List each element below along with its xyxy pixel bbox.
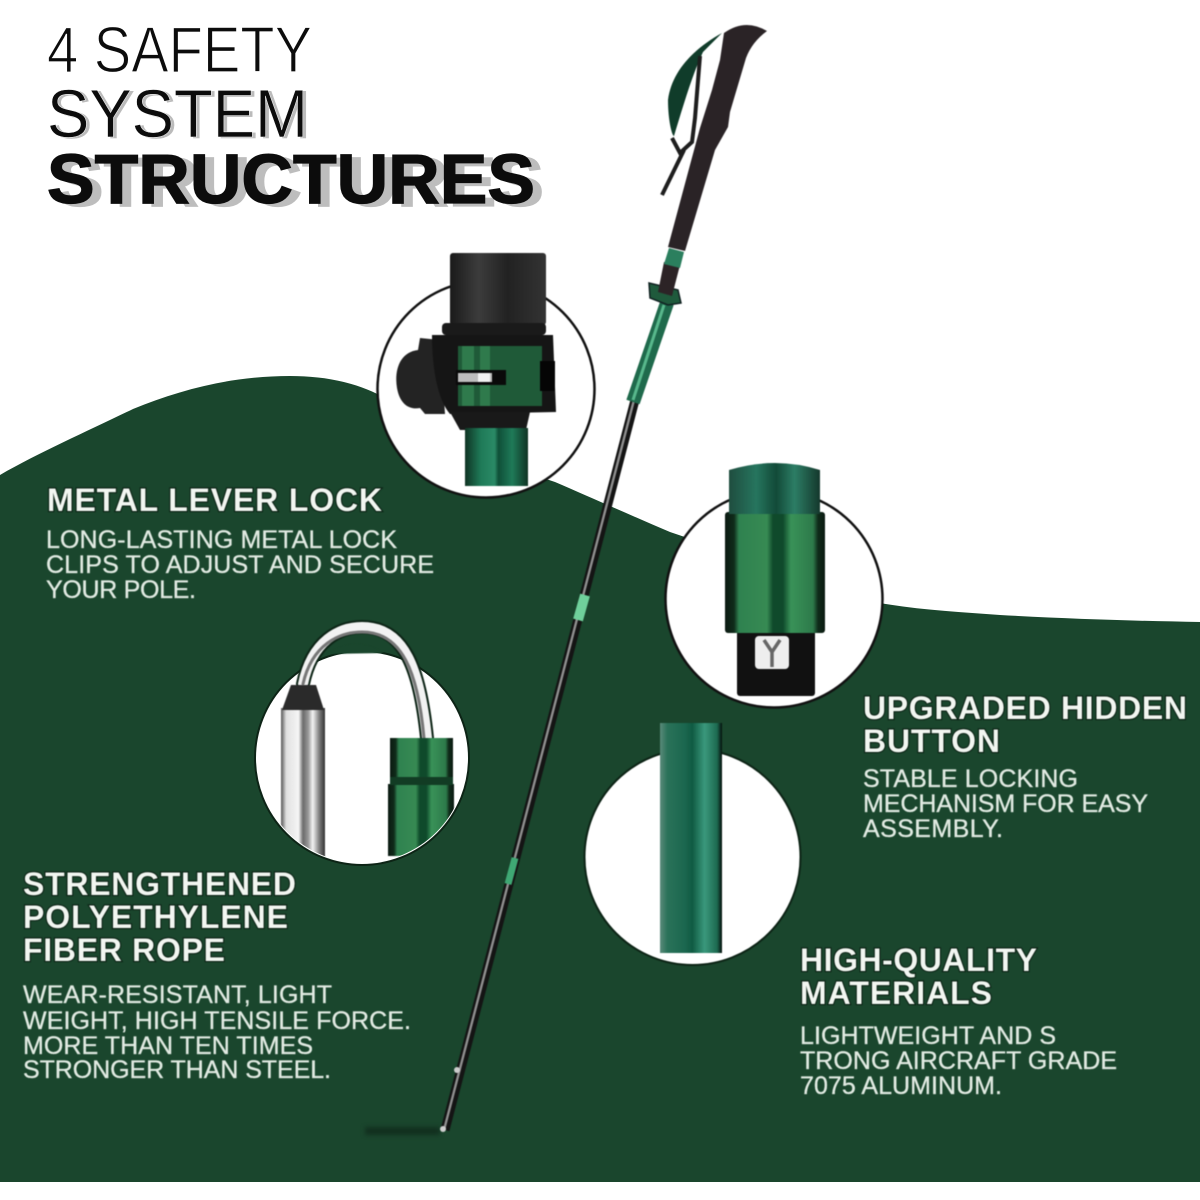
black top socket — [450, 253, 546, 325]
heading: MATERIALS — [800, 975, 992, 1011]
green hill background — [0, 376, 1200, 1182]
text: high-quality materials — [800, 942, 1117, 1100]
description — [46, 526, 434, 604]
description: LONG-LASTING METAL LOCK — [46, 526, 397, 554]
heading — [800, 942, 1037, 1011]
trekking pole — [365, 25, 767, 1135]
spring button — [755, 636, 789, 669]
detail circle: metal lever lock — [378, 253, 594, 498]
title — [47, 13, 535, 218]
heading: STRENGTHENED — [23, 866, 296, 902]
foam grip — [668, 25, 767, 251]
description: MECHANISM FOR EASY — [863, 790, 1148, 818]
title line: SYSTEM: SYSTEM — [47, 76, 308, 152]
green tube — [390, 738, 453, 778]
title line: STRUCTURES: STRUCTURES — [47, 140, 535, 218]
title line: 4 SAFETY: 4 SAFETY — [47, 13, 312, 86]
pole ground shadow — [365, 1127, 440, 1135]
text: metal lever lock — [46, 482, 434, 604]
wrist strap — [668, 33, 722, 136]
heading: BUTTON — [863, 723, 1000, 759]
heading — [863, 690, 1187, 759]
black cap — [282, 685, 324, 710]
detail circle: hidden button — [666, 463, 882, 708]
teal tube — [660, 723, 722, 953]
text: upgraded hidden button — [863, 690, 1187, 843]
description: WEIGHT, HIGH TENSILE FORCE. — [23, 1007, 411, 1035]
description: ASSEMBLY. — [863, 815, 1003, 843]
description — [23, 981, 411, 1084]
rear knob — [396, 338, 445, 414]
upper green shaft — [633, 303, 667, 402]
teal top cylinder — [729, 463, 820, 514]
rope arc — [303, 627, 427, 738]
heading: FIBER ROPE — [23, 932, 225, 968]
description: STRONGER THAN STEEL. — [23, 1056, 331, 1084]
detail circle: fiber rope — [255, 627, 469, 865]
black lower section — [737, 630, 815, 696]
heading: METAL LEVER LOCK — [47, 482, 382, 518]
upper collar — [658, 262, 680, 296]
description: WEAR-RESISTANT, LIGHT — [23, 981, 332, 1009]
description: LIGHTWEIGHT AND S — [800, 1022, 1056, 1050]
green shaft — [465, 428, 528, 486]
green lever plate — [458, 346, 542, 406]
lever lock on pole — [649, 283, 681, 305]
green sleeve — [725, 512, 825, 633]
description — [800, 1022, 1117, 1100]
description: 7075 ALUMINUM. — [800, 1072, 1002, 1100]
carbon shaft — [445, 400, 635, 1130]
heading — [23, 866, 296, 968]
silver tip — [281, 708, 325, 858]
description: YOUR POLE. — [46, 576, 196, 604]
green bands — [578, 595, 585, 620]
description: STABLE LOCKING — [863, 765, 1078, 793]
slot with bolt — [456, 370, 506, 385]
lower collar — [450, 412, 530, 430]
clamp body — [432, 335, 556, 414]
heading: UPGRADED HIDDEN — [863, 690, 1187, 726]
heading: POLYETHYLENE — [23, 899, 288, 935]
description — [863, 765, 1148, 843]
description: CLIPS TO ADJUST AND SECURE — [46, 551, 434, 579]
heading: HIGH-QUALITY — [800, 942, 1037, 978]
text: strengthened rope — [23, 866, 411, 1084]
description: TRONG AIRCRAFT GRADE — [800, 1047, 1117, 1075]
description: MORE THAN TEN TIMES — [23, 1032, 313, 1060]
detail circle: aluminum tube — [584, 723, 800, 965]
